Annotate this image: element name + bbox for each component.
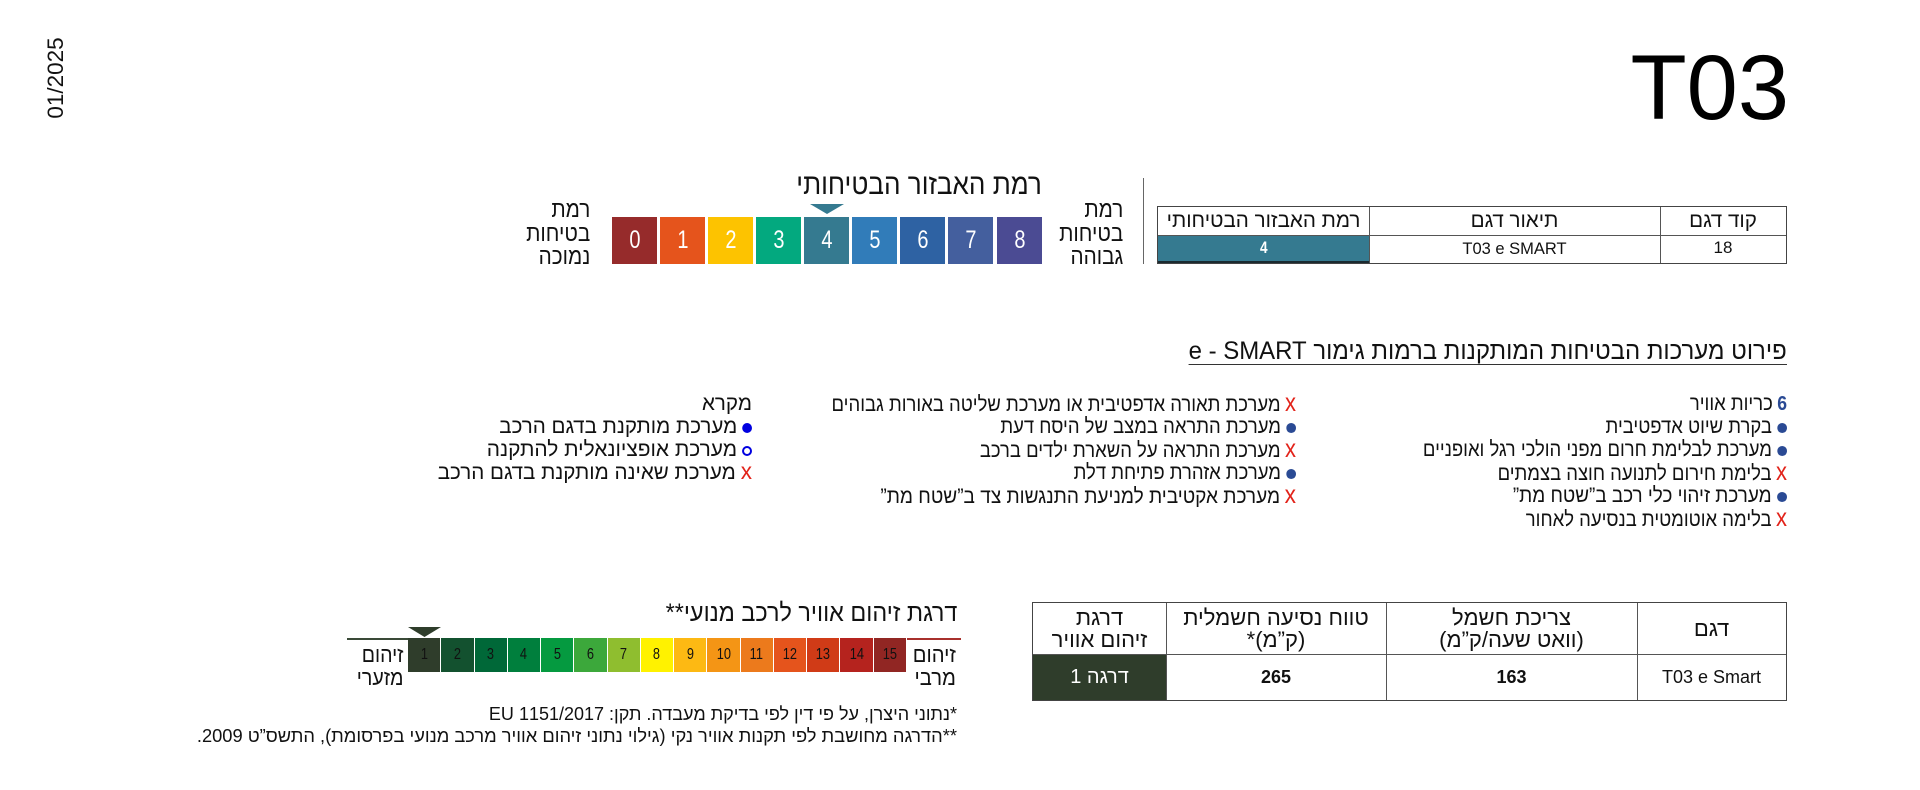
date label: 01/2025 — [43, 37, 68, 119]
safety scale bar: 7 — [965, 226, 976, 254]
cell: pollution header — [1052, 604, 1148, 652]
safety scale heading: רמת האבזור הבטיחותי — [796, 169, 1042, 201]
safety scale bar: 8 — [1014, 226, 1025, 254]
pollution scale bar: 11 — [750, 646, 763, 663]
safety scale bar: 5 — [869, 226, 880, 254]
safety scale high label: רמת — [1084, 196, 1123, 222]
pollution scale high label: מרבי — [915, 665, 956, 690]
cell: model header: דגם — [1694, 616, 1729, 640]
safety scale bar — [612, 217, 1042, 264]
cell: safety level header: רמת האבזור הבטיחותי — [1167, 209, 1360, 232]
pollution scale bar: 12 — [783, 646, 797, 663]
safety scale high label: בטיחות — [1059, 220, 1123, 246]
safety scale low label: בטיחות — [526, 220, 590, 246]
pollution scale bar: 4 — [520, 646, 528, 663]
table: energy and pollution — [1032, 602, 1787, 701]
pollution scale low label: מזערי — [356, 665, 403, 690]
list: safety systems column 1: xבלימת חירום לתנועה חוצה בצמתים — [1498, 458, 1787, 486]
cell: model value: T03 e Smart — [1662, 666, 1761, 686]
legend: מערכת אופציונאלית להתקנה — [487, 438, 737, 461]
pollution scale high label — [913, 642, 956, 690]
legend: xמערכת שאינה מותקנת בדגם הרכב — [438, 458, 752, 484]
footnotes: **הדרגה מחושבת לפי תקנות אוויר נקי (גילוי נתוני זיהום אוויר מרכב מנועי בפרסומת), התשס”ט 2009. — [197, 725, 957, 746]
cell: model description value: T03 e SMART — [1462, 240, 1567, 258]
cell: model code header: קוד דגם — [1689, 209, 1757, 232]
pollution scale bar: 3 — [487, 646, 494, 663]
pollution scale bar: 7 — [620, 646, 627, 663]
footnotes — [197, 704, 957, 746]
list: safety systems column 1: 6כריות אוויר — [1690, 392, 1787, 415]
pollution scale bar: 9 — [687, 646, 694, 663]
safety scale bar: 3 — [773, 226, 784, 254]
cell: consumption header: צריכת חשמל — [1452, 604, 1571, 630]
pollution scale high label: זיהום — [913, 642, 956, 667]
list: safety systems column 2: מערכת התראה במצב של היסח דעת — [1000, 415, 1281, 438]
divider between table and safety scale — [1143, 178, 1144, 264]
list: safety systems column 1: מערכת זיהוי כלי רכב ב”שטח מת” — [1513, 484, 1772, 507]
cell: pollution value: דרגה 1 — [1070, 666, 1129, 688]
legend: מקרא — [702, 392, 752, 415]
safety scale bar: 6 — [917, 226, 928, 254]
pollution scale bar: 15 — [883, 646, 897, 663]
pollution scale bar: 6 — [587, 646, 594, 663]
section heading: safety systems: פירוט מערכות הבטיחות המותקנות ברמות גימור e - SMART — [1189, 337, 1787, 365]
cell: safety level value — [1158, 235, 1369, 263]
pollution scale low label — [356, 642, 404, 690]
cell: safety level value: 4 — [1260, 238, 1267, 257]
pollution scale bar: 8 — [653, 646, 660, 663]
pollution scale bar: 14 — [849, 646, 864, 663]
cell: consumption header — [1439, 604, 1584, 652]
cell: consumption header: (וואט שעה/ק”מ) — [1439, 626, 1584, 652]
legend: מערכת מותקנת בדגם הרכב — [499, 415, 737, 438]
safety scale marker — [810, 204, 844, 214]
pollution scale bar: 2 — [454, 646, 461, 663]
cell: pollution value — [1033, 654, 1166, 700]
safety scale bar: 0 — [629, 226, 640, 254]
cell: range header: (ק”מ)* — [1247, 626, 1305, 652]
list: safety systems column 1: xבלימה אוטומטית בנסיעה לאחור — [1526, 504, 1787, 532]
pollution scale bar: 13 — [816, 646, 830, 663]
cell: model description header: תיאור דגם — [1471, 209, 1558, 232]
list: safety systems column 2: xמערכת התראה על השארת ילדים ברכב — [980, 435, 1296, 463]
safety scale bar: 1 — [677, 226, 688, 254]
cell: range value: 265 — [1261, 666, 1291, 686]
list: safety systems column 1 — [1423, 392, 1787, 532]
cell: model code value: 18 — [1714, 238, 1732, 257]
list: safety systems column 2: xמערכת אקטיבית למניעת התנגשות צד ב”שטח מת” — [880, 481, 1296, 509]
safety scale low label — [526, 196, 590, 269]
safety scale low label: רמת — [551, 196, 590, 222]
list: safety systems column 2: מערכת אזהרת פתיחת דלת — [1074, 461, 1281, 484]
legend — [438, 392, 752, 484]
list: safety systems column 2 — [832, 389, 1296, 509]
footnotes: *נתוני היצרן, על פי דין לפי בדיקת מעבדה. תקן: 1151/2017 EU — [489, 704, 957, 724]
pollution scale bar: 1 — [421, 646, 428, 663]
title: model code: T03 — [1630, 37, 1789, 139]
pollution scale bar — [408, 638, 906, 672]
safety scale bar: 2 — [725, 226, 736, 254]
pollution scale low label: זיהום — [361, 642, 403, 667]
cell: consumption value: 163 — [1496, 666, 1527, 686]
cell: range header — [1183, 604, 1369, 652]
table: model and safety level — [1157, 206, 1787, 264]
list: safety systems column 1: מערכת לבלימת חרום מפני הולכי רגל ואופניים — [1423, 438, 1772, 461]
cell: pollution header: זיהום אוויר — [1052, 626, 1147, 652]
safety scale bar: 4 — [821, 226, 832, 254]
list: safety systems column 1: בקרת שיוט אדפטיבית — [1606, 415, 1772, 438]
pollution scale bar: 5 — [554, 646, 561, 663]
pollution scale bar: 10 — [716, 646, 731, 663]
list: safety systems column 2: xמערכת תאורה אדפטיבית או מערכת שליטה באורות גבוהים — [832, 389, 1296, 417]
cell: range header: טווח נסיעה חשמלית — [1183, 604, 1369, 630]
cell: pollution header: דרגת — [1076, 604, 1123, 630]
safety scale low label: נמוכה — [538, 243, 590, 269]
safety scale high label — [1059, 196, 1123, 269]
pollution scale heading: דרגת זיהום אוויר לרכב מנועי** — [665, 599, 957, 627]
safety scale high label: גבוהה — [1070, 243, 1123, 269]
pollution scale marker — [408, 627, 441, 637]
